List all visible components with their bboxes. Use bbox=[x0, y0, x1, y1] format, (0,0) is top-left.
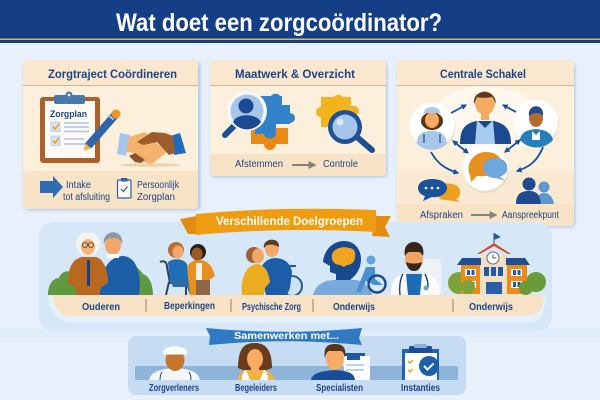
icon: care worker bbox=[514, 100, 559, 147]
label: Afstemmen: Afstemmen bbox=[235, 159, 283, 170]
label: Intake tot afsluiting bbox=[63, 180, 110, 203]
header banner bbox=[0, 0, 600, 43]
label: Controle: Controle bbox=[323, 159, 358, 170]
label bar: Ouderen bbox=[82, 302, 120, 313]
panel: Samenwerken met bbox=[128, 328, 466, 395]
icon: clipboard with Zorgplan: Zorgplan bbox=[50, 109, 87, 120]
ribbon: Samenwerken met bbox=[206, 328, 362, 345]
label bar: Beperkingen bbox=[164, 301, 215, 312]
icon: yellow puzzle with magnifier bbox=[316, 95, 372, 150]
heading: Centrale Schakel bbox=[440, 67, 526, 81]
icon: small clipboard bbox=[118, 178, 131, 198]
icon: puzzle with person magnifier bbox=[225, 91, 295, 150]
label bar: Onderwijs bbox=[333, 302, 375, 313]
heading: Zorgtraject Coördineren bbox=[48, 67, 177, 81]
label bar bbox=[52, 295, 543, 316]
label: Aanspreekpunt: Aanspreekpunt bbox=[502, 210, 559, 221]
person: Zorgverleners bbox=[149, 346, 200, 394]
arrow bbox=[292, 164, 315, 166]
icon: speech bubbles bbox=[418, 179, 460, 202]
icon: nurse bbox=[410, 102, 456, 150]
label: Intake tot afsluiting: tot afsluiting bbox=[63, 192, 110, 203]
icon: blue arrow bbox=[40, 176, 63, 198]
ribbon: Verschillende Doelgroepen bbox=[180, 209, 391, 237]
background band bbox=[0, 328, 600, 337]
icon: two people bbox=[516, 178, 554, 204]
label bar: Psychische Zorg bbox=[242, 302, 301, 313]
doctor bbox=[391, 242, 441, 295]
panel: Verschillende Doelgroepen bbox=[39, 222, 552, 331]
ribbon: Samenwerken met: Samenwerken met... bbox=[234, 330, 339, 342]
icon: coordinator bbox=[460, 91, 511, 144]
label bar: Onderwijs bbox=[469, 302, 513, 313]
icon: Instanties: Instanties bbox=[401, 383, 440, 394]
person: Specialisten bbox=[311, 344, 370, 394]
icon: chat circle bbox=[462, 146, 508, 194]
arrows between people bbox=[431, 105, 543, 173]
label: Persoonlijk Zorgplan bbox=[137, 180, 180, 203]
label: Afspraken: Afspraken bbox=[420, 210, 463, 221]
ribbon: Verschillende Doelgroepen: Verschillende Doelgroepen bbox=[216, 214, 363, 228]
label: Persoonlijk Zorgplan: Persoonlijk bbox=[137, 180, 180, 191]
person: Begeleiders bbox=[235, 343, 277, 394]
arrow bbox=[471, 214, 496, 216]
icon: clipboard with Zorgplan bbox=[40, 92, 100, 163]
title: Wat doet een zorgcoördinator? bbox=[116, 9, 442, 37]
panel: Zorgtraject Coördineren bbox=[23, 60, 200, 210]
person: Specialisten: Specialisten bbox=[316, 383, 363, 394]
panel: Centrale Schakel bbox=[397, 60, 575, 227]
label: Intake tot afsluiting: Intake bbox=[66, 180, 91, 191]
couple with wheelchair bbox=[242, 240, 302, 296]
heading: Maatwerk & Overzicht bbox=[235, 67, 355, 81]
head with brain and wheelchair bbox=[313, 241, 386, 295]
panel: Maatwerk & Overzicht bbox=[210, 60, 387, 177]
icon: pencil bbox=[84, 110, 120, 151]
icon: handshake bbox=[117, 132, 186, 167]
school bbox=[448, 233, 546, 295]
person: Zorgverleners: Zorgverleners bbox=[149, 383, 199, 394]
label: Persoonlijk Zorgplan: Zorgplan bbox=[137, 192, 175, 203]
icon: Instanties bbox=[401, 344, 440, 394]
person: Begeleiders: Begeleiders bbox=[235, 383, 277, 394]
people with wheelchair bbox=[160, 242, 215, 295]
elderly couple bbox=[48, 232, 153, 295]
